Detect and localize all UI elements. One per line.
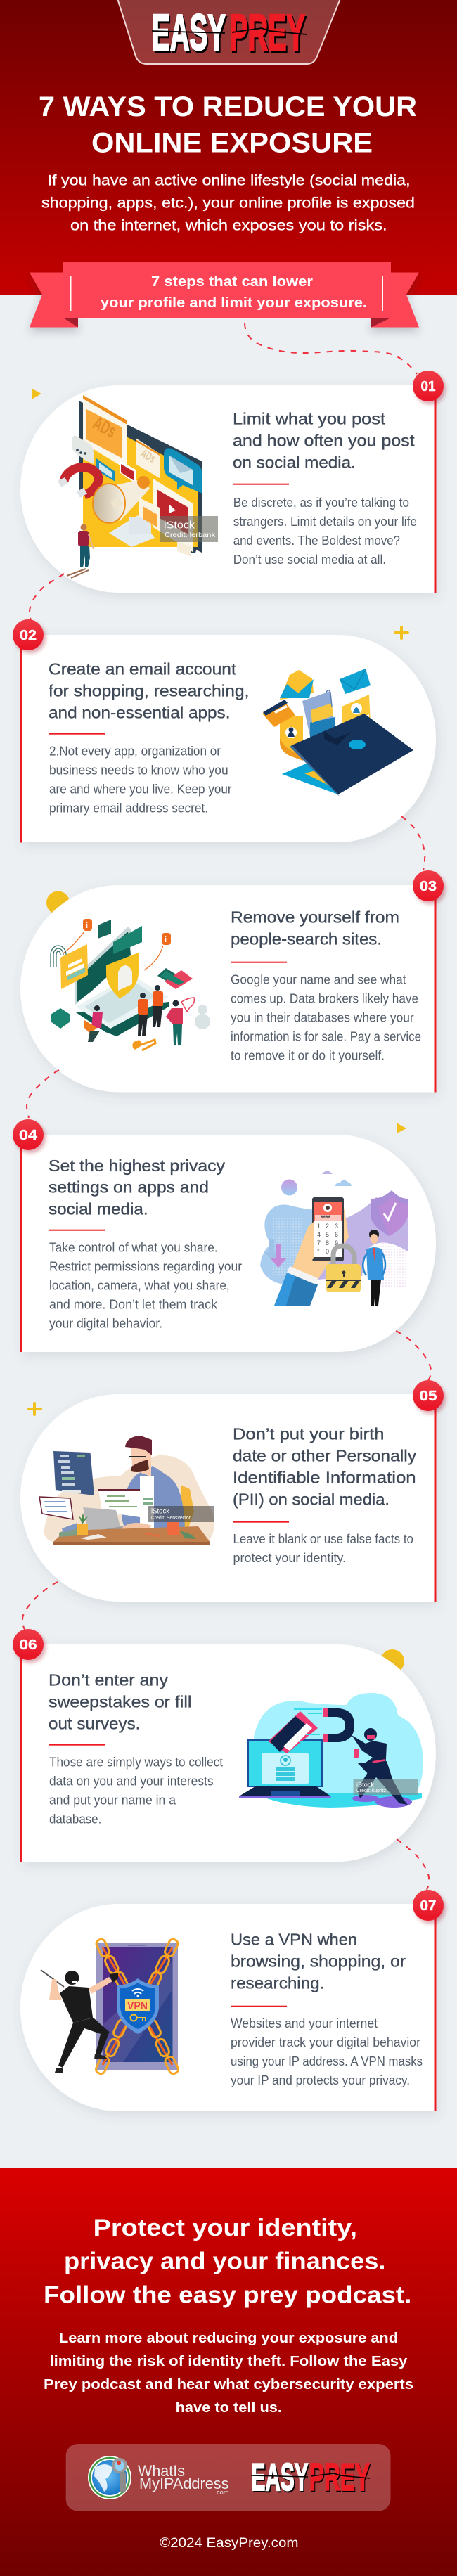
hand holding phone: 5 [326,1231,329,1238]
logo: WhatIsMyIPAddress [88,2456,229,2499]
step 1 body: and events. The Boldest move? [233,534,400,548]
padlock [326,1246,361,1292]
footer paragraph: Learn more about reducing your exposure and [59,2330,398,2346]
logo: EASY PREY small: EASY [252,2456,309,2500]
step 6 body: database. [49,1812,101,1826]
arrow: dashed connector to step 6 [22,1582,58,1630]
step 6 body: data on you and your interests [49,1774,214,1788]
step 5 body: protect your identity. [233,1551,346,1565]
panel: step 7 [20,1904,436,2111]
badge 02 [13,619,44,650]
step 7 body: using your IP address. A VPN masks [231,2054,423,2068]
badge 07: 07 [420,1898,436,1914]
iStock watermark: iStock [164,520,195,532]
icon: yellow circle [380,1649,404,1673]
step 1 heading: on social media. [233,453,356,471]
thief [352,1728,408,1805]
step 1 heading [233,409,415,471]
footer paragraph [44,2330,413,2416]
step 2 body [49,744,232,815]
hand holding phone: * [317,1248,320,1255]
illustration: mail and laptop [262,669,413,797]
step 2 heading [49,659,249,722]
thief with crowbar [41,1970,118,2073]
man body [122,1436,185,1531]
ribbon banner [30,262,419,328]
hand holding phone: 8 [326,1239,329,1247]
step 2 heading: for shopping, researching, [49,682,249,700]
iStock watermark [160,516,218,542]
person looking at screen [78,524,94,567]
badge 04: 04 [19,1128,38,1143]
step 4 heading: Set the highest privacy [49,1157,225,1175]
step 4 body: and more. Don’t let them track [49,1297,218,1311]
step 4 heading: social media. [49,1200,148,1218]
badge 05: 05 [419,1389,437,1404]
step 4 heading: settings on apps and [49,1178,209,1197]
icon: yellow triangle [32,388,41,399]
businessman [363,1230,385,1306]
footer heading: Follow the easy prey podcast. [44,2282,411,2309]
step 3 body: you in their databases where your [231,1010,414,1024]
hand holding phone: 0 [326,1248,329,1255]
iStock watermark: Credit: lerbank [165,531,216,539]
illustration: advertising monitor and megaphone: ADs [89,413,120,442]
logo: WhatIsMyIPAddress: .com [215,2489,229,2496]
illustration: man at laptop [39,1436,214,1545]
logo: EASY PREY: PREY [231,7,307,63]
iStock watermark [148,1506,214,1522]
logo: EASY PREY small: EASY [252,2455,308,2499]
step 3 heading: Remove yourself from [231,908,399,927]
step 6 heading: out surveys. [49,1715,140,1733]
iStock watermark: Credit: Sensvector [151,1514,191,1521]
hand holding phone: 2 [326,1223,329,1230]
panel: step 4 [20,1135,436,1352]
panel: step 3 [20,885,436,1093]
step 3 heading: people-search sites. [231,929,382,948]
step 7 heading [231,1931,406,1992]
logo: WhatIsMyIPAddress: MyIPAddress [139,2475,229,2492]
ribbon text [101,274,367,311]
hand holding phone [274,1197,349,1306]
illustration: people search security: i [86,922,88,930]
step 3 body: comes up. Data brokers likely have [231,991,418,1005]
hand holding phone: 1 [317,1223,321,1230]
footer paragraph: have to tell us. [176,2400,282,2416]
illustration: advertising monitor and megaphone [58,395,218,578]
arrow: dashed connector to step 5 [396,1331,431,1381]
step 1 body [233,496,417,567]
iStock watermark: Credit: kupritz [356,1789,386,1793]
arrow: dashed connector to step 7 [397,1839,429,1890]
step 3 body: Google your name and see what [231,972,406,986]
step 4 body [49,1240,242,1330]
badge 02: 02 [20,628,37,643]
step 5 heading: date or other Personally [233,1447,416,1465]
illustration: people search security: i [165,936,167,944]
badge 01: 01 [420,379,436,394]
step 7 body: provider track your digital behavior [231,2035,420,2049]
officers [138,985,163,1036]
step 5 heading: Don’t put your birth [233,1425,384,1443]
badge 03 [413,870,444,901]
hand holding phone: 6 [335,1231,338,1238]
intro text: on the internet, which exposes you to risks. [70,217,387,234]
footer heading: privacy and your finances. [64,2248,385,2275]
step 6 heading: sweepstakes or fill [49,1693,191,1711]
step 5 heading: Identifiable Information [233,1469,416,1487]
iStock watermark: iStock [356,1782,374,1789]
step 5 heading: (PII) on social media. [233,1490,390,1509]
illustration: VPN-chained phone with thief [41,1938,179,2075]
arrow: dashed connector to step 1 [245,323,417,374]
step 2 heading: and non-essential apps. [49,704,231,722]
arrow: dashed connector to step 4 [27,1070,59,1118]
panel: step 5 [20,1394,436,1602]
icon: yellow circle [46,891,70,914]
step 4 body: location, camera, what you share, [49,1278,230,1292]
step 4 heading [49,1157,225,1218]
footer paragraph: Prey podcast and hear what cybersecurity experts [44,2376,413,2393]
step 7 heading: Use a VPN when [231,1931,357,1949]
badge 04 [13,1119,44,1150]
step 5 body: Leave it blank or use false facts to [233,1532,413,1546]
badge 07 [413,1890,444,1921]
hand holding phone: 4 [317,1231,321,1238]
step 2 heading: Create an email account [49,659,236,678]
hand holding phone: **** [321,1214,331,1221]
title: ONLINE EXPOSURE [91,128,373,159]
intro text [41,172,415,234]
logo: EASY PREY small: PREY [309,2455,370,2499]
title [39,91,417,159]
step 4 body: Take control of what you share. [49,1240,218,1254]
copyright: ©2024 EasyPrey.com [160,2536,298,2551]
arrow: dashed connector to step 2 [30,574,64,620]
iStock watermark: iStock [151,1508,170,1516]
step 6 heading [49,1671,191,1733]
footer heading: Protect your identity, [94,2215,357,2241]
step 3 body [231,972,421,1062]
step 7 body: Websites and your internet [231,2016,378,2030]
step 7 body [231,2016,423,2087]
logo: EASY PREY: PREY [229,5,305,61]
hand holding phone: 3 [335,1223,338,1230]
step 2 body: are and where you live. Keep your [49,782,232,796]
step 3 heading [231,908,399,948]
ribbon text: your profile and limit your exposure. [101,295,367,311]
step 5 body [233,1532,413,1565]
chains [95,1938,179,2075]
arrow: dashed connector to step 3 [401,816,425,870]
step 1 heading: and how often you post [233,431,415,449]
VPN shield: VPN [127,2000,148,2012]
badge 06 [13,1629,44,1660]
step 7 heading: researching. [231,1974,324,1992]
step 1 body: strangers. Limit details on your life [233,515,417,529]
icon: yellow plus [395,627,408,638]
step 1 body: Be discrete, as if you’re talking to [233,496,409,510]
header [0,0,457,295]
title: 7 WAYS TO REDUCE YOUR [39,91,417,122]
step 3 body: to remove it or do it yourself. [231,1048,385,1062]
badge 03: 03 [420,879,437,894]
icon: yellow triangle [397,1123,406,1133]
step 1 heading: Limit what you post [233,409,386,427]
step 5 heading [233,1425,416,1509]
step 4 body: Restrict permissions regarding your [49,1259,242,1273]
logo: EASY PREY: EASY [153,7,227,63]
man [166,1000,183,1045]
illustration: thief stealing card data [239,1693,423,1808]
illustration: advertising monitor and megaphone: ADs [139,446,158,465]
step 3 body: information is for sale. Pay a service [231,1029,421,1043]
VPN shield [117,1978,159,2034]
logo: EASY PREY small: PREY [310,2456,371,2500]
ribbon text: 7 steps that can lower [151,274,313,290]
panel: step 1 [20,385,436,593]
illustration: phone lock and shield [260,1171,408,1306]
footer [0,2168,457,2576]
logo: WhatIsMyIPAddress: WhatIs [138,2462,185,2480]
panel: step 2 [20,635,436,842]
intro text: If you have an active online lifestyle (social media, [48,172,411,188]
footer heading [44,2215,411,2309]
badge 01 [413,371,444,401]
step 2 body: business needs to know who you [49,763,228,777]
badge 05 [413,1380,444,1411]
step 7 heading: browsing, shopping, or [231,1952,406,1971]
hand holding phone: 9 [335,1239,338,1247]
step 2 body: primary email address secret. [49,801,208,815]
step 7 body: your IP and protects your privacy. [231,2073,410,2087]
step 6 body [49,1755,223,1826]
logo badge [117,0,340,64]
step 2 body: 2.Not every app, organization or [49,744,221,758]
step 4 body: your digital behavior. [49,1316,162,1330]
step 6 heading: Don’t enter any [49,1671,168,1689]
iStock watermark [353,1779,418,1795]
badge 06: 06 [20,1637,37,1653]
icon: yellow plus [29,1403,41,1415]
logos box [66,2444,390,2511]
woman with laptop [84,1005,103,1042]
hand holding phone: 7 [317,1239,321,1247]
step 6 body: and put your name in a [49,1793,176,1807]
footer paragraph: limiting the risk of identity theft. Follow the Easy [49,2353,408,2369]
step 6 body: Those are simply ways to collect [49,1755,223,1769]
step 1 body: Don’t use social media at all. [233,553,386,567]
panel: step 6 [20,1644,436,1862]
illustration: people search security [51,919,210,1050]
logo: EASY PREY: EASY [152,5,226,61]
intro text: shopping, apps, etc.), your online profile is exposed [41,195,415,212]
